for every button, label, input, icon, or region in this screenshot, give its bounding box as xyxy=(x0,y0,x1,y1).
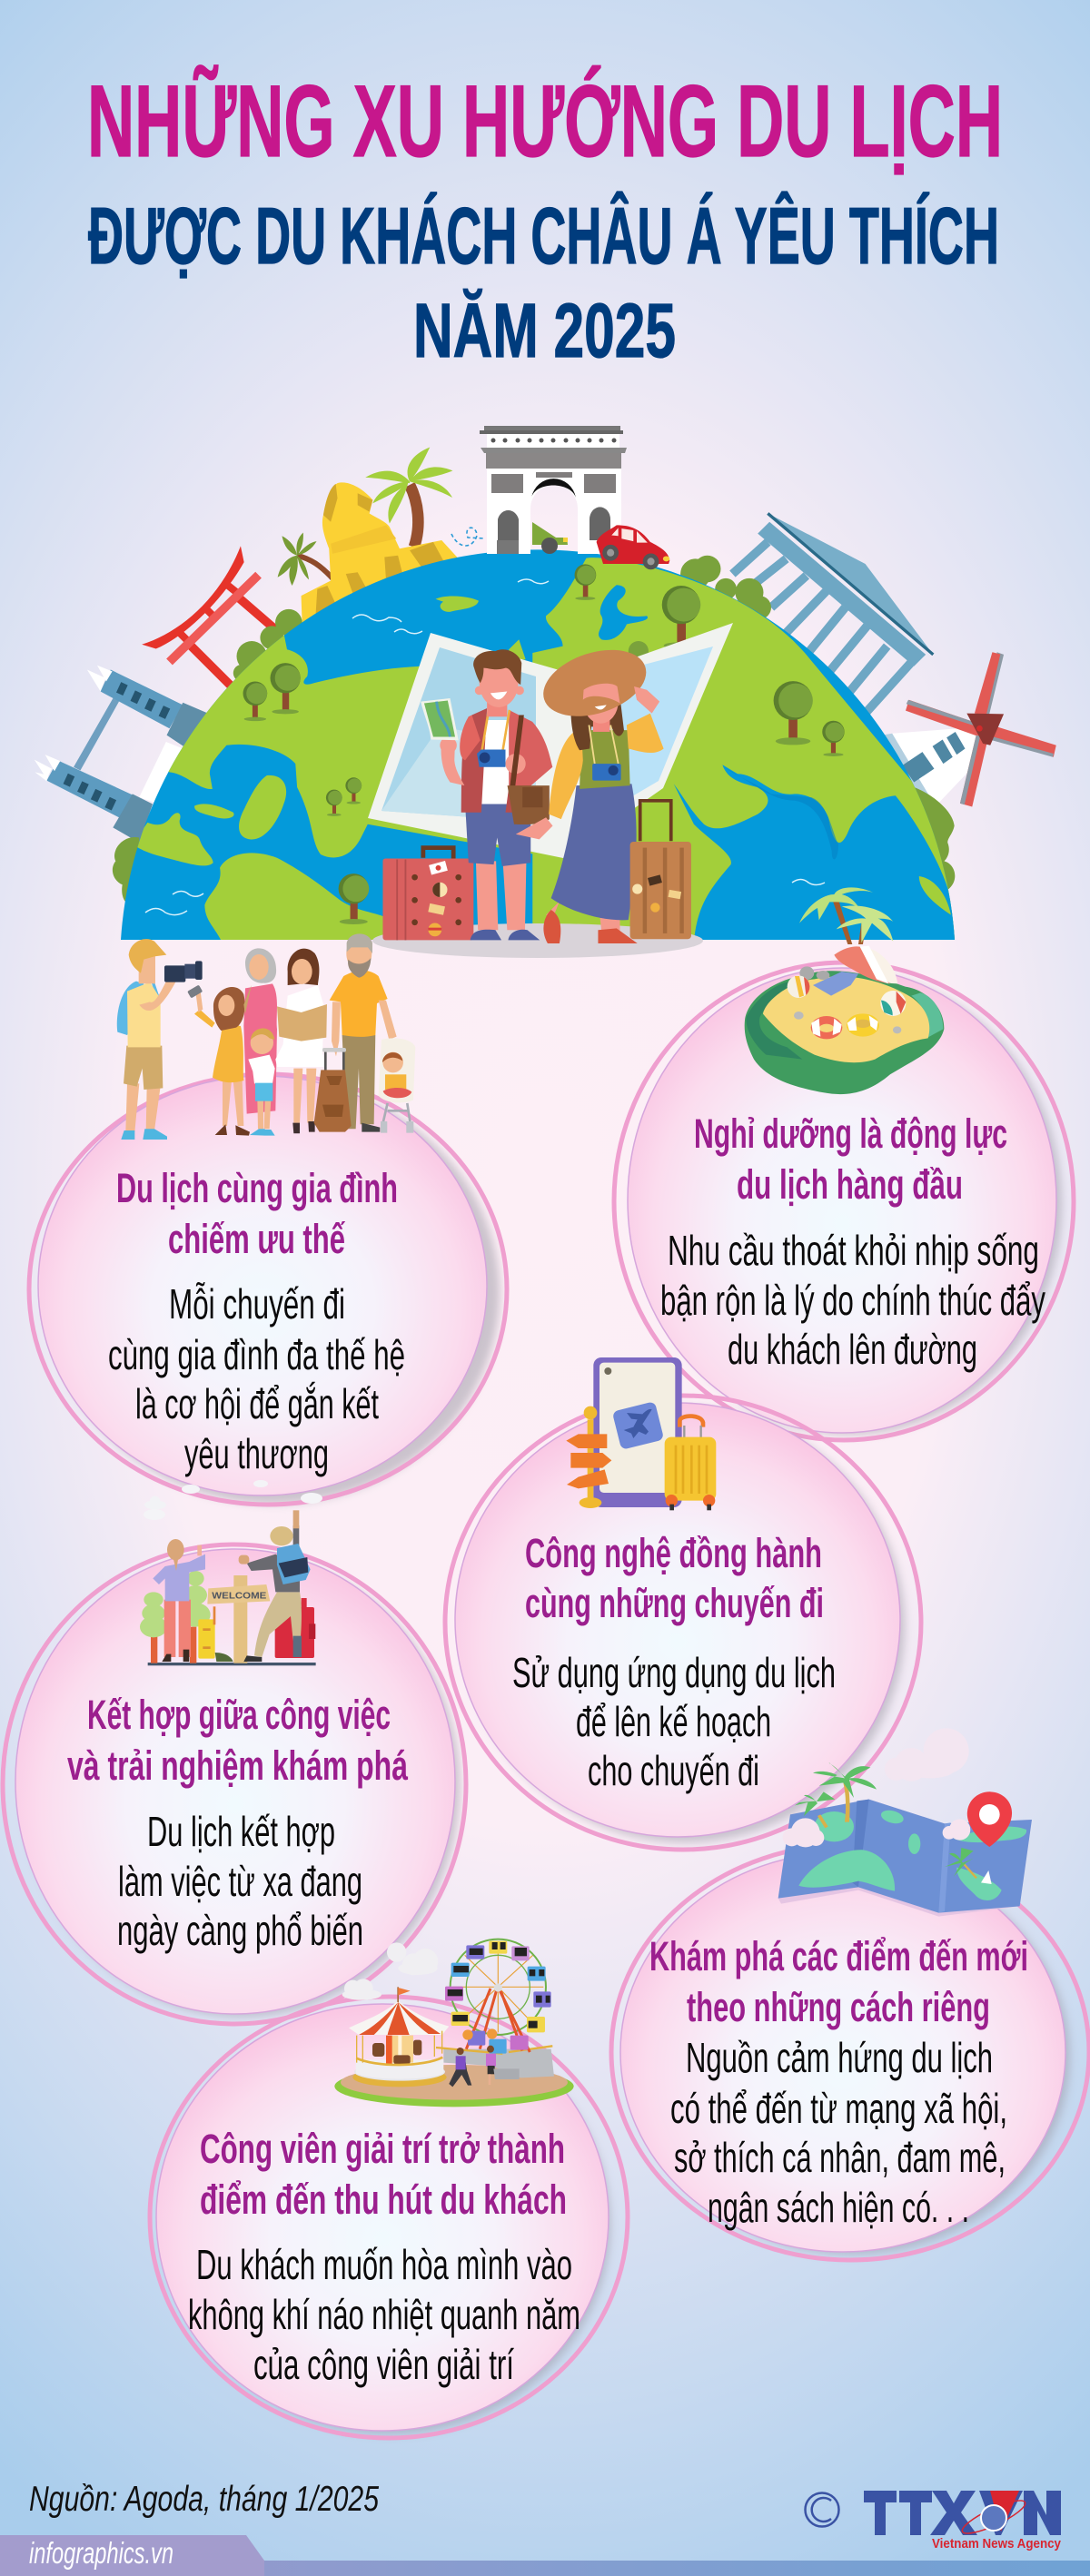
bubble shape xyxy=(3,1545,466,2024)
heading: Kết hợp giữa công việc xyxy=(87,1692,391,1738)
illustration: beach island xyxy=(745,887,944,1094)
body text: cùng gia đình đa thế hệ xyxy=(108,1331,405,1378)
yellow suitcase xyxy=(665,1416,716,1510)
beach umbrella xyxy=(834,946,897,983)
bubble shape xyxy=(614,962,1074,1440)
heading xyxy=(200,2126,567,2223)
heading: Công viên giải trí trở thành xyxy=(200,2126,565,2172)
heading: Du lịch cùng gia đình xyxy=(116,1165,398,1211)
icon: trees on globe xyxy=(243,663,369,924)
girl xyxy=(187,985,250,1136)
clouds xyxy=(342,1942,438,2000)
phone xyxy=(593,1357,682,1507)
body text xyxy=(512,1649,836,1794)
icon: tower bridge xyxy=(35,666,208,843)
heading xyxy=(694,1110,1007,1208)
stairs xyxy=(493,2068,520,2079)
clouds near illustrations xyxy=(144,1480,322,1520)
ferris wheel xyxy=(445,1939,551,2054)
panel: work and exploration xyxy=(3,1545,466,2024)
icon: torii gate xyxy=(142,546,275,688)
title xyxy=(87,64,1003,373)
visitors xyxy=(449,2046,496,2087)
grandmother xyxy=(243,948,277,1114)
ferris wheel platform xyxy=(436,2046,554,2078)
map sheet xyxy=(778,1800,1032,1917)
icon: bushes left xyxy=(113,609,302,902)
woman xyxy=(516,638,664,943)
continents right half xyxy=(532,558,973,955)
icon: bushes right xyxy=(680,556,955,890)
body text: Du lịch kết hợp xyxy=(147,1808,335,1855)
copyright mark xyxy=(805,2493,839,2526)
man's satchel xyxy=(508,785,550,824)
illustration: family xyxy=(117,933,415,1140)
hero illustration: globe with landmarks and tourists xyxy=(35,426,1056,958)
heading: điểm đến thu hút du khách xyxy=(200,2176,567,2223)
icon: arc de triomphe xyxy=(480,426,627,554)
ocean waves xyxy=(145,579,825,915)
body text: Du khách muốn hòa mình vào xyxy=(196,2241,572,2288)
heading: Công nghệ đồng hành xyxy=(525,1530,822,1576)
logo: TTXVN: Vietnam News Agency xyxy=(932,2536,1062,2551)
bubble shape xyxy=(445,1396,921,1850)
mother xyxy=(275,949,327,1133)
heading xyxy=(525,1530,824,1626)
swim rings xyxy=(811,1013,879,1039)
body text xyxy=(188,2241,580,2388)
bubble shape xyxy=(29,1074,507,1505)
illustration: folded map with pin xyxy=(778,1728,1032,1917)
island base xyxy=(745,971,944,1094)
welcome sign xyxy=(207,1575,270,1663)
panel: theme parks xyxy=(150,1997,628,2438)
heading: và trải nghiệm khám phá xyxy=(67,1742,409,1789)
continents left half xyxy=(119,596,536,945)
bubble shape xyxy=(150,1997,628,2438)
small boat xyxy=(981,1870,992,1884)
boy xyxy=(248,1028,275,1136)
location pin xyxy=(967,1791,1012,1847)
heading xyxy=(116,1165,398,1262)
panel: technology xyxy=(445,1396,921,1850)
photographer xyxy=(117,939,203,1140)
ground disc xyxy=(334,2065,574,2107)
panel: resort travel xyxy=(614,962,1074,1440)
man with backpack xyxy=(239,1510,311,1662)
heading xyxy=(67,1692,409,1789)
plane tile xyxy=(612,1401,664,1450)
body text: yêu thương xyxy=(184,1430,329,1477)
landmarks right side xyxy=(680,513,1056,890)
body text xyxy=(108,1280,405,1477)
clouds on map xyxy=(783,1818,970,1847)
trees xyxy=(140,1571,211,1663)
welcome sign: WELCOME xyxy=(212,1592,266,1602)
icon: windmill xyxy=(882,652,1056,806)
clouds xyxy=(885,1728,969,1781)
body text: làm việc từ xa đang xyxy=(118,1858,362,1905)
heading: chiếm ưu thế xyxy=(168,1216,346,1262)
body text: ngày càng phổ biến xyxy=(117,1907,363,1954)
stroller with baby xyxy=(379,1038,415,1133)
clouds xyxy=(144,1495,322,1509)
body text: của công viên giải trí xyxy=(253,2341,514,2388)
website label: infographics.vn xyxy=(29,2536,173,2570)
beach balls xyxy=(788,975,906,1016)
ground line xyxy=(148,1663,316,1665)
carousel xyxy=(349,1987,449,2087)
rolling suitcase xyxy=(314,1048,352,1132)
heading: cùng những chuyến đi xyxy=(525,1580,824,1626)
shadow under tourists xyxy=(372,923,703,958)
footer bar xyxy=(0,2535,1090,2576)
body text: để lên kế hoạch xyxy=(576,1698,771,1745)
sand xyxy=(763,976,929,1062)
palm trees xyxy=(795,1763,976,1878)
panel: family travel xyxy=(29,1074,507,1505)
red suitcase xyxy=(275,1598,315,1658)
palm trees xyxy=(799,887,893,944)
brown suitcase xyxy=(630,801,691,939)
bubble shape xyxy=(611,1844,1089,2260)
body text xyxy=(670,2034,1007,2231)
father xyxy=(330,933,397,1132)
icon: red car xyxy=(597,525,669,569)
icon: palm trees xyxy=(278,448,452,586)
source note: Nguồn: Agoda, tháng 1/2025 xyxy=(29,2480,379,2519)
heading: du lịch hàng đầu xyxy=(737,1161,963,1208)
heading xyxy=(649,1933,1028,2030)
icon: sphinx xyxy=(302,482,461,625)
man xyxy=(421,649,552,940)
icon: greek temple xyxy=(732,513,933,714)
yellow suitcase xyxy=(198,1606,233,1662)
red suitcase xyxy=(382,848,473,940)
globe: ocean and continents xyxy=(109,545,973,955)
body text: Sử dụng ứng dụng du lịch xyxy=(512,1649,836,1696)
panel: explore new destinations xyxy=(611,1844,1089,2260)
body text: cho chuyến đi xyxy=(588,1747,759,1794)
title: NĂM 2025 xyxy=(413,288,676,373)
logo: TTXVN xyxy=(864,2491,1062,2551)
body text xyxy=(117,1808,363,1954)
landmarks left side xyxy=(35,448,461,902)
deck chair and stones xyxy=(794,966,901,1033)
signpost xyxy=(566,1406,611,1508)
body text xyxy=(660,1227,1045,1373)
illustration: welcome sign travellers xyxy=(140,1495,322,1665)
tourists xyxy=(382,638,691,943)
big unfolded map xyxy=(368,623,733,858)
body text: Mỗi chuyến đi xyxy=(169,1280,345,1327)
woman waving xyxy=(153,1539,205,1662)
icon: dashed route xyxy=(451,528,485,546)
body text: là cơ hội để gắn kết xyxy=(135,1380,379,1427)
illustration: phone, sign and suitcase xyxy=(566,1357,716,1510)
map islands xyxy=(798,1808,1026,1900)
illustration: amusement park xyxy=(334,1939,574,2107)
balloons xyxy=(462,2028,497,2040)
body text: không khí náo nhiệt quanh năm xyxy=(188,2291,580,2338)
icon: green car xyxy=(532,522,568,554)
